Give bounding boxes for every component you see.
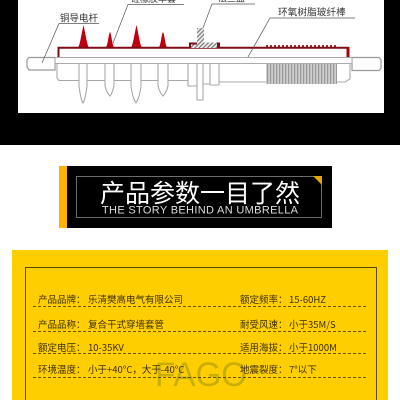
right column parameters: 适用海拔： [240, 340, 288, 354]
leader: flange [203, 4, 255, 28]
sleeve line [58, 48, 348, 57]
leader: silicone sleeve [113, 4, 184, 43]
panel: bushing diagram [18, 0, 384, 113]
label: copper rod: 铜导电杆 [60, 12, 99, 24]
right column parameters: 耐受风速： [240, 317, 288, 331]
panel: parameters [12, 250, 388, 400]
lower shed and flange inner lines [79, 64, 219, 86]
left column parameters: 10-35KV [88, 340, 124, 354]
sleeve right end [346, 47, 350, 57]
right column parameters: 额定频率： [240, 292, 288, 306]
copper conductor rod [27, 58, 381, 70]
right column parameters [240, 292, 337, 376]
epoxy glass rod [55, 58, 352, 64]
left column parameters [38, 292, 184, 376]
metal flange [191, 28, 217, 48]
black top band [0, 0, 400, 145]
banner subtitle: THE STORY BEHIND AN UMBRELLA [102, 204, 299, 216]
left column parameters: 小于+40°C，大于-40°C [88, 362, 184, 376]
panel: section banner [59, 166, 332, 228]
red silicone sleeve with sheds [78, 25, 167, 48]
inner frame [76, 176, 322, 218]
left column parameters: 复合干式穿墙套管 [88, 317, 164, 331]
left column parameters: 产品品称： [38, 317, 86, 331]
left column parameters: 乐清樊高电气有限公司 [88, 292, 183, 306]
left column parameters: 产品品牌： [38, 292, 86, 306]
sleeve ribs [266, 45, 337, 47]
right column parameters: 地震裂度： [240, 362, 288, 376]
right column parameters: 小于1000M [289, 340, 337, 354]
banner title: 产品参数一目了然 [100, 180, 300, 208]
leader: epoxy rod [248, 18, 355, 57]
watermark: FAGO [155, 356, 247, 394]
left column parameters: 额定电压： [38, 340, 86, 354]
right column parameters: 小于35M/S [289, 317, 336, 331]
metal flange base [189, 42, 220, 48]
left column parameters: 环境温度： [38, 362, 86, 376]
dashed row lines [33, 306, 368, 378]
threaded section [266, 64, 337, 84]
right column parameters: 7°以下 [289, 362, 317, 376]
lower body outline with sheds [57, 64, 350, 103]
right column parameters: 15-60HZ [289, 292, 326, 306]
inner frame [26, 268, 376, 400]
yellow accent strip [59, 166, 67, 228]
leader: copper rod [42, 24, 99, 63]
corner triangle [313, 176, 322, 185]
label: epoxy rod: 环氧树脂玻纤棒 [278, 6, 346, 18]
